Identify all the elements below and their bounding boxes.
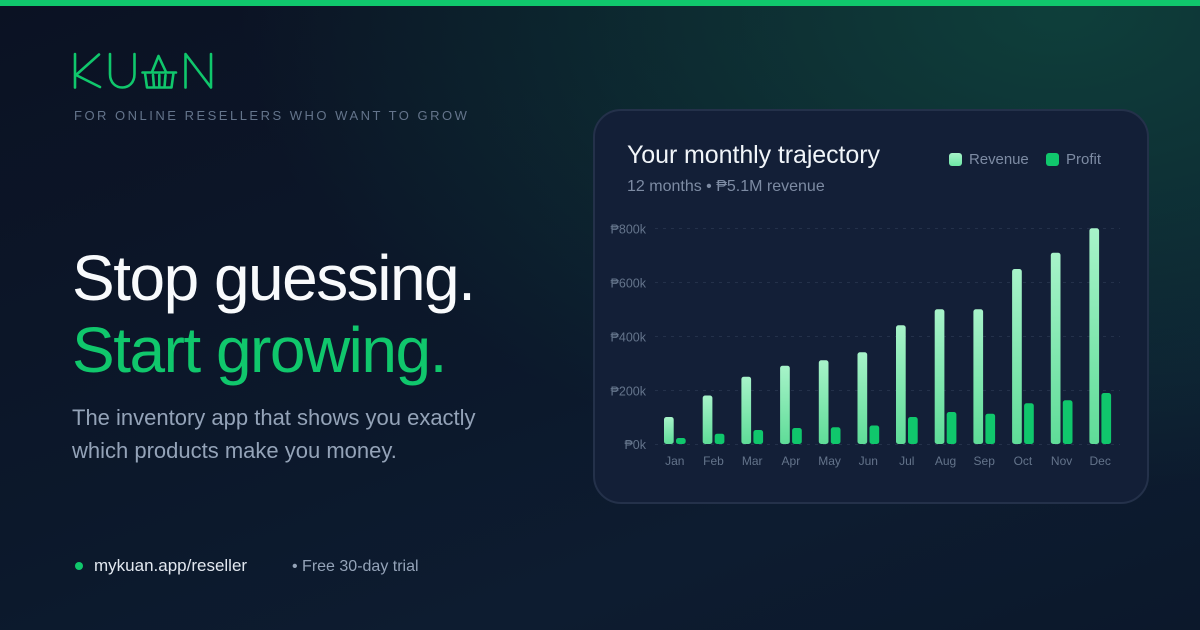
trial note: • Free 30-day trial <box>292 558 419 575</box>
logo: KUAN wordmark with basket <box>74 52 212 89</box>
y axis labels: ₱0k <box>624 438 647 452</box>
legend swatch: profit <box>1046 153 1059 166</box>
y axis labels: ₱200k <box>611 384 647 398</box>
x axis month labels: Oct <box>1014 454 1033 468</box>
headline <box>72 242 474 386</box>
y axis labels <box>611 222 647 452</box>
x axis month labels: Nov <box>1051 454 1072 468</box>
headline line 1: Stop guessing. <box>72 242 474 314</box>
x axis month labels: Apr <box>782 454 800 468</box>
url: mykuan.app/reseller <box>94 556 247 575</box>
card title: Your monthly trajectory <box>627 141 880 169</box>
subheading: which products make you money. <box>72 438 397 463</box>
card subtitle: 12 months • ₱5.1M revenue <box>627 178 825 195</box>
x axis month labels: Jan <box>665 454 684 468</box>
subheading: The inventory app that shows you exactly <box>72 405 476 430</box>
tagline: FOR ONLINE RESELLERS WHO WANT TO GROW <box>74 108 469 123</box>
legend label: profit: Profit <box>1066 151 1101 168</box>
status dot <box>75 562 83 570</box>
top accent bar <box>0 0 1200 6</box>
url row <box>75 556 247 575</box>
x axis month labels: Jun <box>859 454 878 468</box>
subheading <box>72 405 476 463</box>
legend <box>949 151 1101 168</box>
x axis month labels: Feb <box>703 454 724 468</box>
y axis labels: ₱800k <box>611 222 647 236</box>
y axis labels: ₱600k <box>611 276 647 290</box>
headline line 2: Start growing. <box>72 314 446 386</box>
legend label: revenue: Revenue <box>969 151 1029 168</box>
profit bars <box>676 393 1111 444</box>
x axis month labels: Aug <box>935 454 956 468</box>
x axis month labels: May <box>818 454 841 468</box>
panel: chart card <box>593 109 1149 504</box>
legend swatch: revenue <box>949 153 962 166</box>
revenue bars <box>664 228 1099 444</box>
x axis month labels: Dec <box>1090 454 1111 468</box>
x axis month labels: Mar <box>742 454 763 468</box>
x axis month labels: Jul <box>899 454 914 468</box>
x axis month labels <box>665 454 1111 468</box>
x axis month labels: Sep <box>974 454 995 468</box>
y axis labels: ₱400k <box>611 330 647 344</box>
